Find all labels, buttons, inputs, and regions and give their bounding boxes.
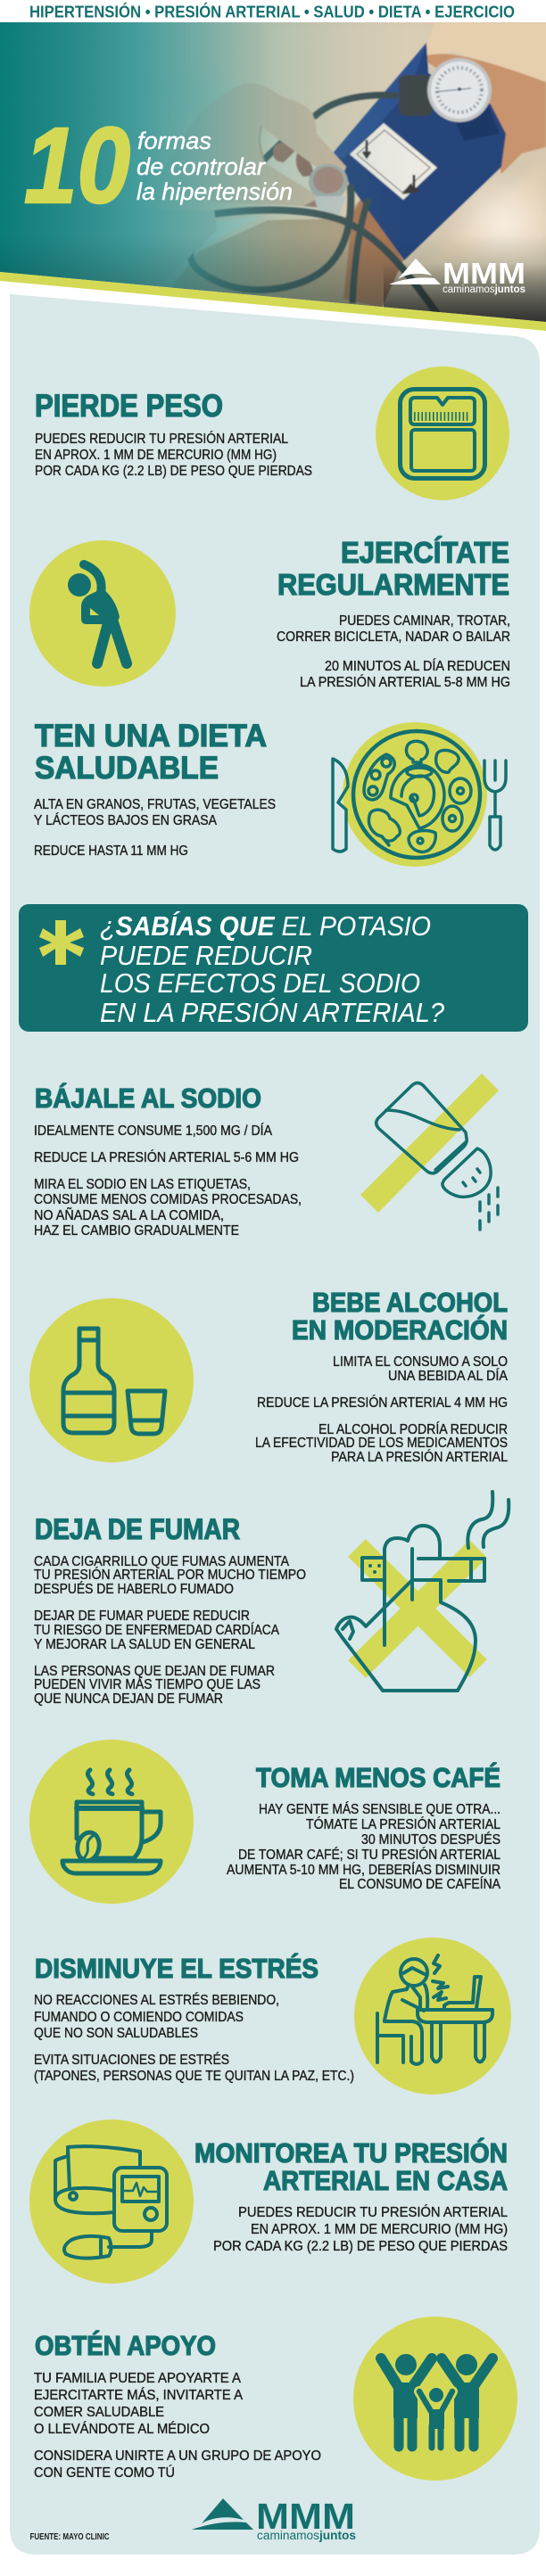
body text: COMER SALUDABLE (34, 2405, 164, 2420)
body text (34, 797, 276, 859)
section: ejercítate regularmente (29, 536, 510, 690)
body text: EVITA SITUACIONES DE ESTRÉS (34, 2053, 229, 2068)
body text: MIRA EL SODIO EN LAS ETIQUETAS, (34, 1177, 251, 1192)
body text: TU RIESGO DE ENFERMEDAD CARDÍACA (34, 1623, 280, 1638)
body text: REDUCE LA PRESIÓN ARTERIAL 4 MM HG (257, 1395, 508, 1411)
body text (35, 432, 312, 479)
nurse hand (218, 84, 347, 206)
section: toma menos café (29, 1740, 501, 1904)
heading: ARTERIAL EN CASA (263, 2165, 508, 2196)
body text: DE TOMAR CAFÉ; SI TU PRESIÓN ARTERIAL (238, 1848, 500, 1863)
body text: PUEDES REDUCIR TU PRESIÓN ARTERIAL (238, 2205, 508, 2220)
hero photo: blood pressure measurement (0, 22, 546, 325)
section: deja de fumar (34, 1492, 509, 1707)
heading: SALUDABLE (35, 751, 219, 786)
body text (213, 2205, 508, 2254)
loop tube (190, 187, 351, 290)
cuff (333, 43, 506, 260)
icon: stretching person (29, 540, 176, 687)
second nurse hand (187, 210, 216, 259)
icon: family (353, 2317, 517, 2481)
icon: stressed person at desk (354, 1938, 511, 2095)
heading: TOMA MENOS CAFÉ (256, 1762, 500, 1793)
callout text (100, 910, 444, 1028)
body text: TÓMATE LA PRESIÓN ARTERIAL (306, 1817, 500, 1832)
section: monitorea tu presión (29, 2119, 508, 2284)
heading: PIERDE PESO (35, 389, 223, 424)
icon: bottle and glass (29, 1298, 194, 1462)
icon: hand with cigarette crossed (336, 1492, 509, 1691)
chest piece (309, 164, 348, 200)
body text: LA PRESIÓN ARTERIAL 5-8 MM HG (300, 675, 510, 690)
subtitle (136, 128, 293, 205)
big tube (214, 210, 437, 314)
section: disminuye el estrés (34, 1938, 511, 2095)
logo: MMM footer: caminamosjuntos (257, 2529, 356, 2542)
logo: MMM header: MMM (443, 257, 525, 290)
heading (194, 2136, 508, 2196)
body text: POR CADA KG (2.2 LB) DE PESO QUE PIERDAS (213, 2239, 508, 2254)
body text: TU FAMILIA PUEDE APOYARTE A (34, 2371, 242, 2386)
body text: Y MEJORAR LA SALUD EN GENERAL (34, 1637, 255, 1652)
curled fingers (273, 142, 296, 162)
body text (34, 1554, 306, 1707)
callout text: LOS EFECTOS DEL SODIO (100, 968, 420, 999)
body text: NO REACCIONES AL ESTRÉS BEBIENDO, (34, 1993, 279, 2008)
body text: HAY GENTE MÁS SENSIBLE QUE OTRA... (259, 1802, 500, 1817)
section: bájale al sodio (34, 1074, 499, 1239)
body text: FUMANDO O COMIENDO COMIDAS (34, 2010, 244, 2025)
body text: PUEDES CAMINAR, TROTAR, (339, 613, 510, 629)
number ten: 10 (24, 104, 130, 226)
body text (34, 1123, 302, 1239)
body text: PARA LA PRESIÓN ARTERIAL (331, 1450, 508, 1465)
heading: DISMINUYE EL ESTRÉS (35, 1953, 318, 1984)
subtitle: formas (137, 128, 211, 154)
top keyword band: HIPERTENSIÓN • PRESIÓN ARTERIAL • SALUD • DIETA • EJERCICIO (29, 2, 515, 21)
body text: REDUCE HASTA 11 MM HG (34, 844, 188, 859)
white sleeve strip (152, 216, 261, 290)
body text: AUMENTA 5-10 MM HG, DEBERÍAS DISMINUIR (227, 1863, 500, 1878)
body text: QUE NUNCA DEJAN DE FUMAR (34, 1691, 223, 1707)
heading (292, 1287, 508, 1346)
icon: home blood pressure monitor (29, 2119, 194, 2284)
body text: EJERCITARTE MÁS, INVITARTE A (34, 2388, 244, 2403)
body text: CADA CIGARRILLO QUE FUMAS AUMENTA (34, 1554, 290, 1569)
heading: BÁJALE AL SODIO (35, 1082, 261, 1114)
section: obtén apoyo (34, 2317, 517, 2481)
heading: DEJA DE FUMAR (35, 1513, 240, 1545)
body text: CORRER BICICLETA, NADAR O BAILAR (277, 630, 510, 645)
heading: OBTÉN APOYO (35, 2330, 216, 2361)
upper tube (263, 95, 395, 160)
body text: PUEDES REDUCIR TU PRESIÓN ARTERIAL (35, 432, 288, 447)
heading: REGULARMENTE (277, 568, 509, 601)
body text (34, 2371, 321, 2481)
body text (34, 1993, 354, 2084)
body text (227, 1802, 501, 1892)
callout text: EN LA PRESIÓN ARTERIAL? (100, 997, 444, 1028)
icon: scale (376, 366, 509, 500)
body text: LIMITA EL CONSUMO A SOLO (333, 1354, 508, 1370)
heading (35, 719, 267, 786)
gauge (399, 75, 433, 116)
logo: MMM footer: MMM (256, 2496, 355, 2537)
shirt sleeve (421, 22, 546, 82)
body text: CONSIDERA UNIRTE A UN GRUPO DE APOYO (34, 2448, 321, 2464)
logo: MMM header (389, 257, 525, 295)
body text: PUEDEN VIVIR MÁS TIEMPO QUE LAS (34, 1677, 261, 1692)
body text (255, 1354, 509, 1465)
body text: 30 MINUTOS DESPUÉS (361, 1832, 500, 1848)
heading: TEN UNA DIETA (35, 719, 267, 753)
body text: CONSUME MENOS COMIDAS PROCESADAS, (34, 1192, 302, 1207)
section: pierde peso (35, 366, 509, 500)
callout: sabías que (19, 904, 528, 1032)
body text: TU PRESIÓN ARTERIAL POR MUCHO TIEMPO (34, 1568, 306, 1583)
section: dieta saludable (34, 719, 506, 867)
icon: plate of food (333, 722, 506, 867)
body text: O LLEVÁNDOTE AL MÉDICO (34, 2422, 210, 2437)
body text: REDUCE LA PRESIÓN ARTERIAL 5-6 MM HG (34, 1150, 299, 1165)
section: bebe alcohol (29, 1287, 509, 1465)
patient forearm (172, 199, 376, 307)
body text: UNA BEBIDA AL DÍA (388, 1369, 509, 1384)
heading: EN MODERACIÓN (292, 1313, 508, 1346)
body text: Y LÁCTEOS BAJOS EN GRASA (34, 813, 218, 828)
icon: asterisk (39, 920, 84, 965)
body text: QUE NO SON SALUDABLES (34, 2026, 198, 2041)
heading (277, 536, 509, 601)
callout text: ¿SABÍAS QUE EL POTASIO (100, 910, 431, 942)
heading: BEBE ALCOHOL (312, 1287, 508, 1318)
body text: LA EFECTIVIDAD DE LOS MEDICAMENTOS (255, 1436, 508, 1451)
body text: HAZ EL CAMBIO GRADUALMENTE (34, 1223, 239, 1239)
icon: salt shaker crossed (360, 1074, 499, 1230)
body text: EN APROX. 1 MM DE MERCURIO (MM HG) (35, 448, 277, 463)
body text: EL ALCOHOL PODRÍA REDUCIR (318, 1422, 508, 1437)
body text: DESPUÉS DE HABERLO FUMADO (34, 1582, 234, 1597)
logo: MMM footer (192, 2496, 356, 2542)
icon: coffee cup (29, 1740, 194, 1904)
body text: NO AÑADAS SAL A LA COMIDA, (34, 1208, 224, 1223)
body text (277, 613, 510, 690)
logo: MMM header: caminamosjuntos (443, 284, 525, 295)
body text: IDEALMENTE CONSUME 1,500 MG / DÍA (34, 1123, 273, 1139)
body text: LAS PERSONAS QUE DEJAN DE FUMAR (34, 1664, 275, 1679)
yellow diagonal ribbon (0, 272, 546, 331)
heading: MONITOREA TU PRESIÓN (194, 2136, 508, 2169)
cuff label (350, 123, 437, 200)
body text: (TAPONES, PERSONAS QUE TE QUITAN LA PAZ, ETC.) (34, 2069, 354, 2084)
body text: EL CONSUMO DE CAFEÍNA (339, 1877, 501, 1892)
body text: EN APROX. 1 MM DE MERCURIO (MM HG) (251, 2222, 508, 2237)
body text: POR CADA KG (2.2 LB) DE PESO QUE PIERDAS (35, 464, 312, 479)
body text: 20 MINUTOS AL DÍA REDUCEN (325, 659, 510, 674)
body text: DEJAR DE FUMAR PUEDE REDUCIR (34, 1609, 250, 1624)
source note: FUENTE: MAYO CLINIC (30, 2532, 109, 2542)
body text: CON GENTE COMO TÚ (34, 2465, 175, 2481)
callout text: PUEDE REDUCIR (100, 941, 312, 971)
hero title (24, 104, 293, 226)
upper arm (421, 53, 546, 174)
body text: ALTA EN GRANOS, FRUTAS, VEGETALES (34, 797, 276, 812)
subtitle: la hipertensión (136, 178, 293, 205)
subtitle: de controlar (136, 153, 266, 180)
heading: EJERCÍTATE (341, 536, 509, 569)
